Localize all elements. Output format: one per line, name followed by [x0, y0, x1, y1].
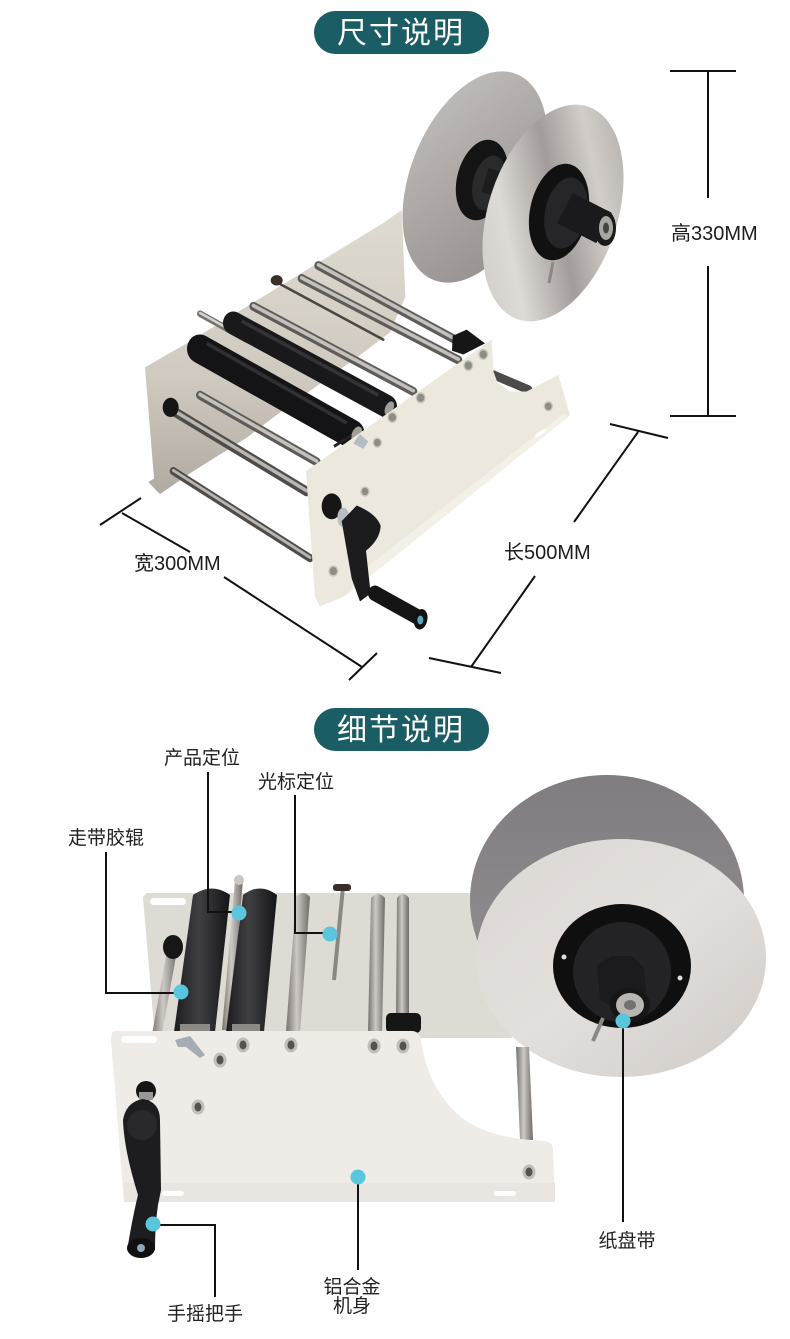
callout: 铝合金机身: 铝合金: [323, 1276, 381, 1298]
callout: 铝合金机身: 机身: [333, 1295, 371, 1317]
title: 尺寸说明: 尺寸说明: [337, 17, 465, 50]
bearing: [594, 210, 616, 246]
dimension: length 500MM: [429, 424, 668, 673]
product photo: labeller perspective view: [145, 50, 649, 631]
front plate: [306, 340, 570, 606]
rods: [172, 265, 528, 558]
rear plate: [145, 210, 405, 494]
product photo: labeller front view: [111, 775, 766, 1258]
back reel disc: [374, 50, 576, 304]
callout: 走带胶辊: 走带胶辊: [68, 827, 144, 849]
left plate slot: [150, 343, 181, 363]
rear rod: [516, 1047, 533, 1140]
callout: 走带胶辊: [68, 827, 188, 1000]
title: 细节说明: [314, 708, 489, 751]
dimension: length 500MM: 长500MM: [504, 541, 591, 564]
front hub: [520, 158, 598, 266]
crank handle: [136, 1081, 156, 1101]
rubber roller left: [174, 888, 230, 1032]
callout: 手摇把手: 手摇把手: [167, 1303, 243, 1325]
rubber rollers: [233, 323, 387, 406]
crank handle: [322, 493, 342, 519]
callout: 光标定位: 光标定位: [258, 771, 334, 793]
knob and rod caps: [271, 275, 283, 286]
dimension: height 330MM: 高330MM: [671, 222, 758, 245]
callout: 手摇把手: [146, 1216, 243, 1325]
back reel disc: [470, 775, 744, 1025]
title: 尺寸说明: [314, 11, 489, 54]
rear plate: [143, 893, 512, 1038]
reel shaft: [485, 180, 545, 197]
dimension: width 300MM: [100, 498, 377, 680]
reel pin: [593, 1018, 603, 1041]
front reel disc: [476, 839, 766, 1077]
callout: 产品定位: [164, 747, 246, 920]
callout: 光标定位: [258, 771, 338, 942]
base flange: [123, 1183, 555, 1202]
dimension: width 300MM: 宽300MM: [134, 552, 221, 575]
reel pin: [549, 262, 553, 283]
bearing: [610, 988, 650, 1022]
clamp: [386, 1013, 421, 1033]
base flange: [347, 414, 570, 595]
callout: 纸盘带: [598, 1014, 656, 1252]
wing nut: [353, 434, 368, 449]
front shaft: [565, 208, 604, 228]
bolts: [193, 1039, 534, 1178]
wing nut: [175, 1036, 205, 1058]
guide rods: [151, 880, 409, 1040]
callout: 纸盘带: 纸盘带: [598, 1230, 656, 1252]
back hub: [448, 134, 516, 226]
callout: 铝合金机身: [323, 1170, 381, 1317]
dimension: height 330MM: [670, 71, 758, 416]
front plate: [111, 1031, 555, 1202]
bolts: [329, 350, 552, 576]
machine body: [150, 265, 570, 631]
front reel disc: [457, 87, 649, 339]
reel hub: [553, 904, 691, 1028]
rubber roller right: [226, 888, 277, 1032]
reel shaft: [597, 956, 647, 1006]
title: 细节说明: 细节说明: [337, 714, 465, 747]
callout: 产品定位: 产品定位: [164, 747, 240, 769]
